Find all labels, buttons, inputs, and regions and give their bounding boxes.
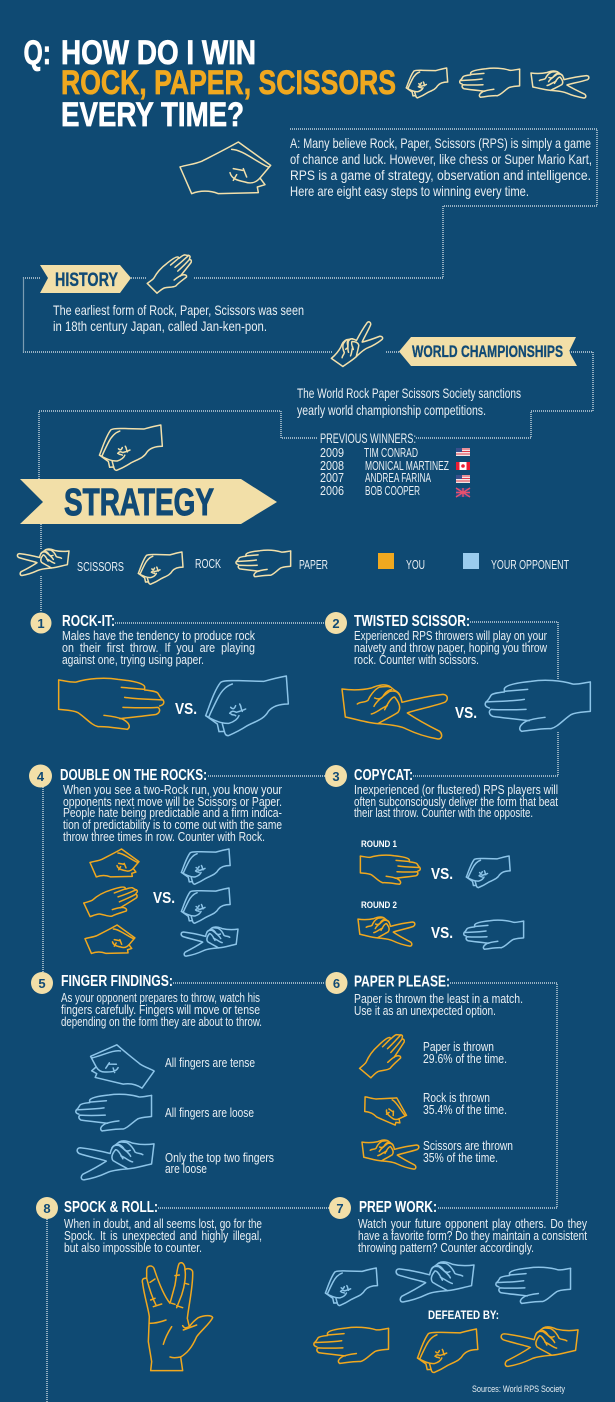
step 7: prep work: 7 [336, 1201, 344, 1216]
title: ROCK, PAPER, SCISSORS [61, 64, 396, 102]
step 3: copycat: ROUND 2 [361, 900, 397, 911]
swatch: your opponent [463, 553, 479, 569]
banner: strategy: STRATEGY [64, 482, 214, 524]
icon: round 2 opponent paper [464, 920, 524, 949]
icon: header scissors [531, 71, 589, 98]
previous winners table [320, 430, 449, 498]
answer text [290, 135, 592, 199]
icon: paper stat [359, 1028, 412, 1084]
step 8: spock and roll: When in doubt, and all seems lost, go for the [64, 1217, 262, 1231]
step 6: paper please: 35.4% of the time. [423, 1103, 507, 1117]
icon: spock hand [142, 1263, 213, 1371]
icon: flag Canada [456, 462, 470, 470]
step 1: rock-it: Males have the tendency to produce rock [62, 629, 256, 643]
step 4: double on the rocks [29, 764, 282, 956]
icon: your scissors [342, 685, 447, 739]
icon: your paper 2 [83, 880, 143, 926]
step 1: rock-it: 1 [37, 616, 45, 631]
step 8: spock and roll [36, 1197, 262, 1371]
step 2: twisted scissor: Experienced RPS throwers will play on your [354, 629, 547, 643]
championships text: The World Rock Paper Scissors Society sanctions [297, 385, 521, 401]
step 7: prep work [314, 1197, 588, 1373]
icon: large rock [180, 142, 271, 194]
step 4: double on the rocks: 4 [37, 769, 45, 784]
step 5: finger findings: are loose [165, 1162, 207, 1176]
previous winners table: TIM CONRAD [364, 446, 418, 460]
step 8: spock and roll: Spock. It is unexpected and highly illegal, [64, 1229, 262, 1243]
step 5: finger findings: 5 [38, 976, 46, 991]
icon: header paper [460, 68, 520, 97]
icon: tense rock [86, 1040, 158, 1090]
title: Q: [24, 34, 51, 72]
step 3: copycat: Inexperienced (or flustered) RPS players will [354, 783, 558, 797]
legend: YOUR OPPONENT [491, 558, 569, 572]
icon: opponent paper [485, 680, 590, 731]
banner: history [40, 265, 131, 293]
icon: opponent paper [496, 1267, 571, 1303]
icon: loose paper [76, 1094, 152, 1131]
icon: your rock 3 [85, 925, 135, 953]
previous winners table: 2006 [320, 484, 344, 498]
icon: championship scissors [330, 318, 385, 375]
step 3: copycat: VS. [431, 866, 453, 883]
icon: opponent scissors [181, 927, 238, 956]
step 2: twisted scissor: rock. Counter with scissors. [354, 653, 479, 667]
icon: opponent rock 2 [181, 888, 230, 923]
icon: round 1 opponent rock [466, 856, 510, 888]
legend: PAPER [299, 558, 328, 572]
swatch: you [378, 553, 394, 569]
step 2: twisted scissor: 2 [332, 616, 340, 631]
step 2: twisted scissor: VS. [455, 705, 477, 722]
step 1: rock-it [30, 612, 288, 736]
step 6: paper please: 6 [333, 976, 340, 991]
step 5: finger findings [31, 972, 274, 1180]
step 5: finger findings: FINGER FINDINGS: [61, 973, 173, 990]
legend: SCISSORS [77, 560, 124, 574]
step 3: copycat: 3 [332, 769, 340, 784]
championships text [297, 385, 521, 418]
step 5: finger findings: All fingers are loose [165, 1106, 254, 1120]
icon: your rock [417, 1329, 478, 1373]
icon: scissors stat [362, 1140, 419, 1169]
step 3: copycat [325, 765, 558, 949]
icon: rock stat [359, 1086, 411, 1128]
step 3: copycat: ROUND 1 [361, 839, 398, 850]
previous winners table: BOB COOPER [365, 484, 420, 498]
previous winners table: 2008 [320, 459, 344, 473]
icon: header rock [406, 68, 448, 98]
step 1: rock-it: on their first throw. If you are playing [62, 641, 255, 655]
step 4: double on the rocks: People hate being predictable and a firm indica- [63, 806, 282, 820]
legend: YOU [406, 558, 425, 572]
step 1: rock-it: ROCK-IT: [62, 613, 115, 630]
step 1: rock-it: VS. [175, 701, 197, 718]
banner: world championships [399, 337, 577, 366]
title: EVERY TIME? [61, 96, 244, 134]
icon: round 1 your paper [360, 855, 420, 884]
championships text: yearly world championship competitions. [297, 402, 486, 418]
step 4: double on the rocks: VS. [153, 890, 175, 907]
answer text: Here are eight easy steps to winning every time. [290, 183, 529, 199]
step 4: double on the rocks: DOUBLE ON THE ROCKS: [60, 767, 207, 784]
step 1: rock-it: against one, trying using paper. [62, 653, 204, 667]
step 6: paper please: Paper is thrown the least in a match. [354, 992, 523, 1006]
step 2: twisted scissor: naivety and throw paper, hoping you throw [354, 641, 548, 655]
step 5: finger findings: Only the top two fingers [165, 1151, 274, 1165]
icon: your rock 1 [90, 849, 139, 877]
step 7: prep work: throwing pattern? Counter accordingly. [358, 1241, 534, 1255]
step 3: copycat: COPYCAT: [354, 767, 413, 784]
step 2: twisted scissor [325, 612, 590, 739]
icon: opponent scissors [396, 1262, 474, 1302]
previous winners table: MONICAL MARTINEZ [365, 459, 449, 473]
step 5: finger findings: fingers carefully. Fingers will move or tense [61, 1003, 260, 1017]
step 8: spock and roll: but also impossible to counter. [64, 1241, 202, 1255]
step 8: spock and roll: 8 [43, 1201, 51, 1216]
icon: opponent rock [325, 1268, 377, 1306]
step 6: paper please: 35% of the time. [423, 1151, 498, 1165]
step 4: double on the rocks: tion of predictability is to come out with the same [63, 818, 282, 832]
step 6: paper please: Scissors are thrown [423, 1139, 513, 1153]
step 5: finger findings: As your opponent prepares to throw, watch his [61, 991, 260, 1005]
step 6: paper please: Paper is thrown [423, 1040, 494, 1054]
step 3: copycat: VS. [431, 925, 453, 942]
icon: history hand [147, 248, 199, 300]
icon: legend rock [138, 552, 183, 584]
icon: opponent rock [206, 676, 288, 736]
step 6: paper please: Use it as an unexpected option. [354, 1004, 496, 1018]
icon: strategy rock [100, 425, 162, 470]
icon: your paper [314, 1327, 389, 1363]
previous winners table: ANDREA FARINA [365, 471, 431, 485]
step 8: spock and roll: SPOCK & ROLL: [64, 1199, 158, 1216]
icon: legend paper [236, 550, 291, 577]
step 5: finger findings: depending on the form they are about to throw. [61, 1015, 262, 1029]
step 3: copycat: their last throw. Counter with the opposite. [354, 806, 533, 820]
step 4: double on the rocks: When you see a two-Rock run, you know your [63, 783, 282, 797]
history text: in 18th century Japan, called Jan-ken-pon. [53, 318, 267, 334]
icon: flag UK [456, 488, 470, 497]
history text: The earliest form of Rock, Paper, Scissors was seen [53, 302, 304, 318]
step 2: twisted scissor: TWISTED SCISSOR: [354, 613, 470, 630]
previous winners table: 2009 [320, 446, 344, 460]
step 4: double on the rocks: throw three times in row. Counter with Rock. [63, 830, 265, 844]
banner: history: HISTORY [55, 270, 118, 291]
step 6: paper please: Rock is thrown [423, 1091, 490, 1105]
title: HOW DO I WIN [61, 34, 256, 72]
icon: legend scissors [17, 549, 69, 575]
step 6: paper please: 29.6% of the time. [423, 1052, 507, 1066]
step 3: copycat: often subconsciously deliver the form that beat [354, 795, 558, 809]
previous winners table: PREVIOUS WINNERS: [320, 430, 416, 446]
history text [53, 302, 304, 334]
step 4: double on the rocks: opponents next move will be Scissors or Paper. [63, 795, 282, 809]
icon: round 2 your scissors [358, 917, 415, 946]
title [24, 34, 396, 134]
icon: flag USA [456, 475, 470, 483]
step 6: paper please: PAPER PLEASE: [354, 974, 450, 990]
icon: your scissors [501, 1327, 578, 1366]
step 7: prep work: DEFEATED BY: [428, 1308, 499, 1322]
legend: ROCK [195, 557, 221, 571]
icon: your paper [59, 678, 164, 729]
step 5: finger findings: All fingers are tense [165, 1056, 255, 1070]
icon: opponent rock 1 [181, 849, 230, 884]
icon: top fingers scissors [77, 1141, 154, 1180]
sources: Sources: World RPS Society [472, 1384, 565, 1394]
step 6: paper please [326, 972, 523, 1169]
icon: flag USA [456, 448, 470, 456]
previous winners table: 2007 [320, 471, 344, 485]
step 7: prep work: PREP WORK: [359, 1199, 437, 1216]
legend [17, 549, 569, 584]
